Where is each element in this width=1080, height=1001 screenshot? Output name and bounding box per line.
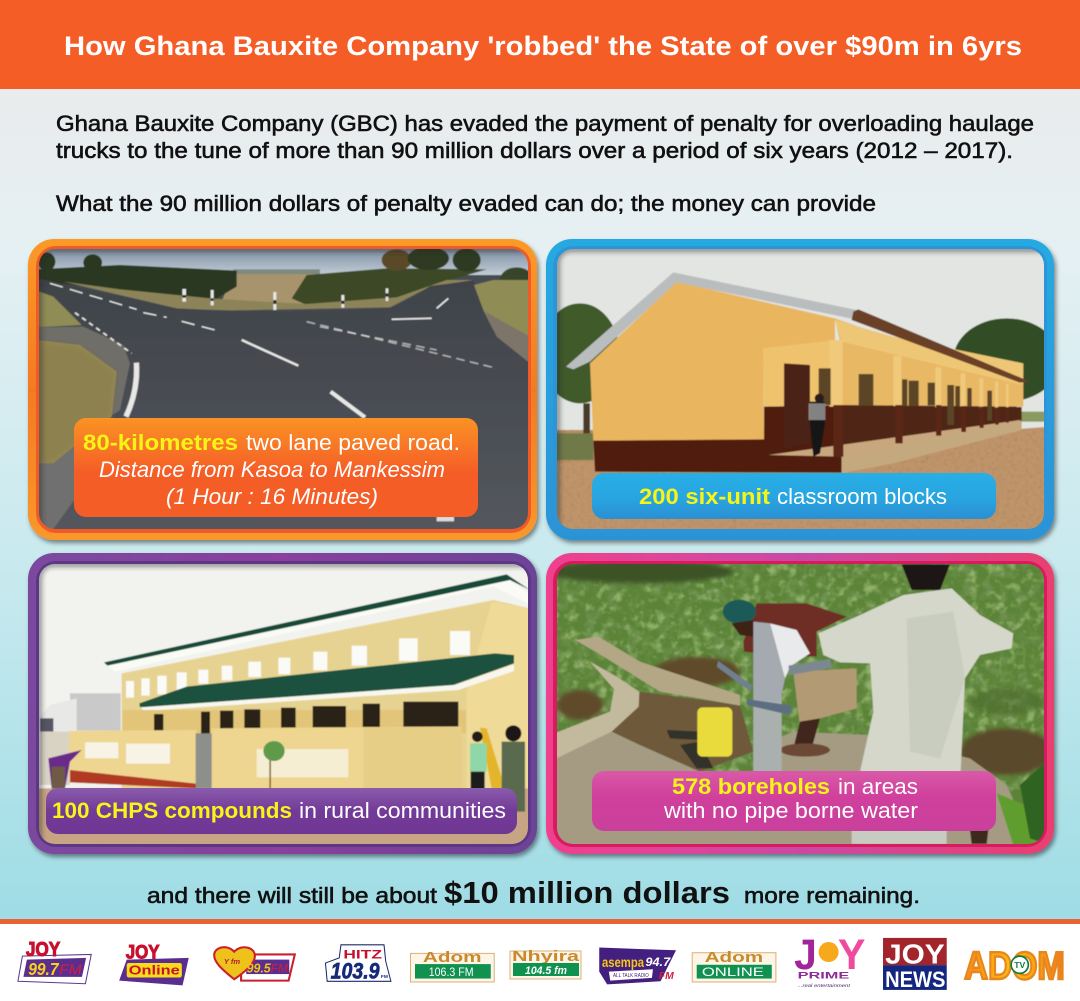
panel: boreholes [546, 553, 1054, 854]
logo: Nhyira 104.5 FM [510, 948, 581, 979]
logo: Joy 99.7 FM: FM [59, 961, 82, 978]
closing line: and there will still be about [147, 883, 438, 908]
logo: Y FM 99.5: FM [271, 962, 288, 975]
logo: Joy News: JOY [885, 938, 945, 969]
photo: school building [557, 249, 1044, 529]
intro text: trucks to the tune of more than 90 million dollars over a period of six years (2012 – 2017). [56, 138, 1013, 163]
logo: Joy News [883, 938, 947, 992]
logo: Hitz 103.9 FM: HITZ [343, 948, 383, 962]
caption: road [74, 418, 478, 517]
logo: Adom Online: Adom [705, 949, 763, 966]
caption: boreholes: with no pipe borne water [663, 798, 918, 823]
caption: CHPS: 100 CHPS compounds [52, 798, 292, 823]
logo: Adom 106.3 FM [411, 949, 494, 982]
logo: Y FM 99.5 [214, 947, 295, 981]
logo: Adom TV: ADOM [964, 945, 1065, 988]
caption: road: 80-kilometres [83, 430, 238, 455]
logo: Nhyira 104.5 FM: Nhyira [512, 948, 580, 965]
title banner: How Ghana Bauxite Company 'robbed' the State of over $90m in 6yrs [64, 31, 1022, 61]
caption: classrooms [592, 473, 996, 519]
logo: Hitz 103.9 FM: 103.9 [331, 959, 380, 984]
logo: Joy Online: Online [129, 962, 180, 977]
logo: Joy Prime: Y [838, 931, 866, 979]
logo: Asempa 94.7 FM: 94.7 [645, 955, 671, 969]
logo row [18, 931, 1065, 992]
caption: classrooms: classroom blocks [777, 484, 947, 509]
logo: Hitz 103.9 FM [325, 945, 391, 984]
logo: Asempa 94.7 FM: asempa [602, 955, 644, 970]
logo: Adom 106.3 FM: Adom [423, 949, 481, 966]
logo: Adom Online: ONLINE [702, 966, 764, 979]
closing line [147, 875, 920, 910]
panel: classroom blocks [541, 239, 1060, 540]
caption: road: two lane paved road. [246, 430, 460, 455]
logo: Joy Prime: PRIME [798, 971, 849, 981]
caption: CHPS: in rural communities [299, 798, 506, 823]
intro text [56, 111, 1034, 216]
title banner [0, 0, 1080, 89]
logo: Adom TV: TV [1014, 960, 1025, 970]
logo: Asempa 94.7 FM: ALL TALK RADIO [613, 973, 649, 979]
caption: boreholes: 578 boreholes [672, 774, 830, 799]
caption: CHPS [46, 788, 517, 834]
panel: CHPS compounds [28, 553, 537, 854]
logo: Joy Prime: ...real entertainment [798, 983, 851, 988]
intro text: What the 90 million dollars of penalty evaded can do; the money can provide [56, 191, 876, 216]
caption: boreholes: in areas [838, 774, 918, 799]
logo: Asempa 94.7 FM [599, 948, 676, 984]
caption: road: Distance from Kasoa to Mankessim [99, 457, 445, 482]
logo: Y FM 99.5: 99.5 [247, 960, 271, 975]
logo: Adom Online [692, 949, 776, 982]
footer strip [0, 919, 1080, 924]
logo: Joy 99.7 FM: 99.7 [28, 959, 60, 979]
photo: borehole pump [547, 558, 1053, 852]
caption: road: (1 Hour : 16 Minutes) [166, 484, 378, 509]
closing line: $10 million dollars [444, 875, 730, 910]
logo: Y FM 99.5: Y fm [224, 957, 240, 966]
logo: Joy 99.7 FM [18, 939, 91, 984]
caption: boreholes [592, 771, 996, 831]
logo: Joy Prime [794, 931, 866, 988]
logo: Joy News: NEWS [885, 967, 945, 992]
logo: Joy Online [119, 943, 189, 985]
logo: Joy Prime: J [794, 931, 817, 979]
photo: road junction [33, 243, 533, 537]
intro text: Ghana Bauxite Company (GBC) has evaded the payment of penalty for overloading haulage [56, 111, 1034, 136]
caption: classrooms: 200 six-unit [639, 484, 771, 509]
logo: Asempa 94.7 FM: FM [659, 971, 674, 982]
logo: Joy Online: JOY [126, 943, 160, 964]
logo: Nhyira 104.5 FM: 104.5 fm [525, 965, 567, 977]
logo: Hitz 103.9 FM: FM [381, 974, 388, 980]
closing line: more remaining. [744, 883, 920, 908]
photo: health compound [33, 558, 533, 852]
panel: paved road [28, 239, 537, 540]
logo: Joy 99.7 FM: JOY [26, 939, 60, 961]
logo: Adom 106.3 FM: 106.3 FM [429, 966, 474, 979]
